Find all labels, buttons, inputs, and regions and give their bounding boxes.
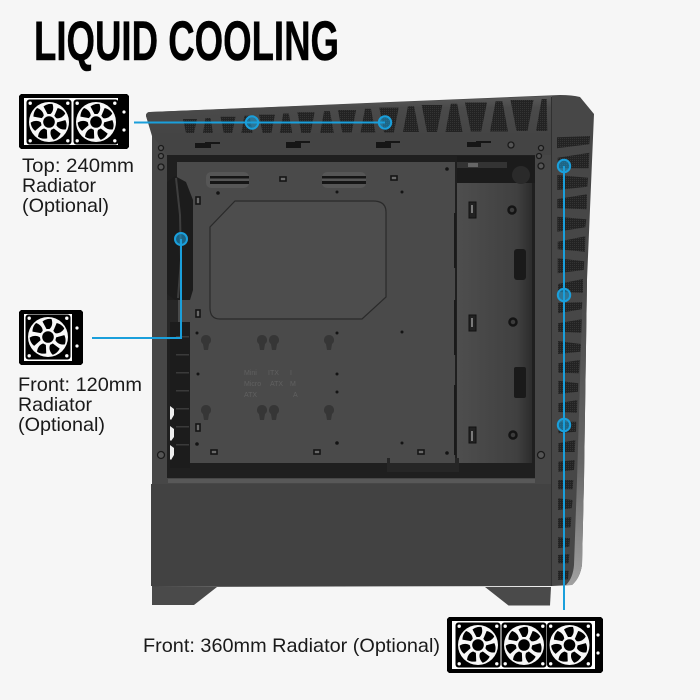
label: front 360mm radiator: Front: 360mm Radiator (Optional) (143, 635, 440, 657)
motherboard tray (177, 162, 456, 463)
tray form-factor labels: Mini (244, 370, 257, 377)
tray mounting dots (195, 167, 449, 455)
bottom drive bracket (387, 458, 459, 472)
tray form-factor labels: ITX (268, 370, 279, 377)
standoff keyholes (201, 335, 334, 420)
frame screws (158, 142, 544, 458)
small tie-down squares (196, 176, 424, 454)
tray form-factor labels: Micro (244, 381, 261, 388)
right cable chamber (457, 156, 535, 463)
front 360mm leader line (558, 160, 570, 610)
expansion slots (167, 300, 190, 468)
top radiator leader line (134, 116, 391, 129)
lower shroud panel (151, 484, 552, 586)
label: top 240mm radiator: Radiator (22, 175, 96, 197)
PC case (146, 95, 594, 606)
label: front 120mm radiator: Front: 120mm (18, 374, 142, 396)
right frame rail (535, 134, 552, 484)
tray form-factor labels (244, 370, 298, 399)
right foot (485, 587, 551, 606)
CPU cutout (210, 201, 386, 319)
icon: 120mm radiator (19, 310, 83, 365)
case side and front silhouette (146, 95, 594, 587)
tray form-factor labels: I (290, 370, 292, 377)
label: top 240mm radiator: Top: 240mm (22, 155, 134, 177)
tray form-factor labels: M (290, 381, 296, 388)
bottom ledge (168, 479, 552, 483)
frame top band (152, 134, 552, 155)
front 120mm leader line (92, 233, 187, 338)
top panel vents (183, 99, 547, 133)
rear fan (167, 176, 193, 300)
left foot (152, 587, 217, 605)
tray edge cuts (454, 213, 456, 455)
title: LIQUID COOLING (34, 9, 339, 72)
tray form-factor labels: A (293, 392, 298, 399)
cable holes (206, 172, 366, 188)
top panel band (146, 96, 552, 136)
top frame slots (195, 141, 491, 148)
front edge highlight (566, 280, 587, 585)
icon: 240mm radiator (19, 94, 129, 149)
side divider line (551, 97, 552, 586)
label: front 120mm radiator (18, 374, 142, 436)
left frame rail (152, 135, 167, 483)
label: front 120mm radiator: Radiator (18, 394, 92, 416)
front panel vents (557, 136, 590, 580)
fan frame highlight (176, 178, 181, 298)
tray form-factor labels: ATX (270, 381, 283, 388)
label: top 240mm radiator: (Optional) (22, 195, 109, 217)
icon: 360mm radiator (447, 617, 603, 673)
interior cavity (167, 155, 535, 478)
label: top 240mm radiator (22, 155, 134, 217)
label: front 120mm radiator: (Optional) (18, 414, 105, 436)
tray form-factor labels: ATX (244, 392, 257, 399)
